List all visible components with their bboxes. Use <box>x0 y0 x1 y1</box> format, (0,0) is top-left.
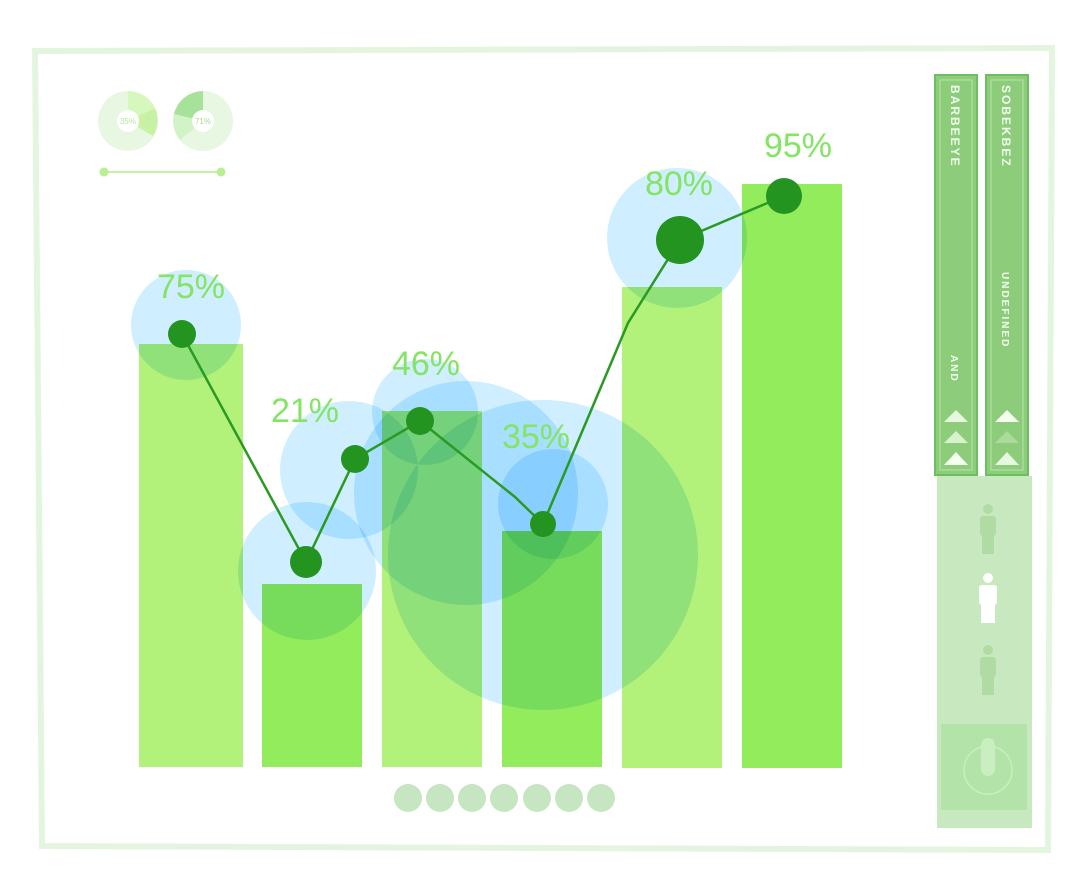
line chart <box>168 178 802 578</box>
side panel 2: UNDEFINED <box>999 272 1010 348</box>
value labels: 21% <box>271 392 339 430</box>
value labels: 95% <box>764 127 832 165</box>
icon: person highlighted <box>979 573 997 623</box>
side panel 1: AND <box>948 355 959 383</box>
icon: person faded 2 <box>980 645 996 695</box>
icon: power button <box>964 738 1012 794</box>
bar chart <box>139 184 842 768</box>
donut: 35%: 35% <box>120 117 136 126</box>
slider <box>100 168 226 176</box>
value labels <box>157 127 832 456</box>
pagination dots <box>394 784 615 812</box>
side panel 1 <box>935 75 977 475</box>
side panel 1: BARBEEYE <box>948 85 962 168</box>
value labels: 46% <box>392 345 460 383</box>
people panel <box>937 476 1032 828</box>
donut charts <box>98 91 233 176</box>
side panel 2: SOBEKBEZ <box>999 85 1013 168</box>
icon: person faded <box>980 504 996 554</box>
bubbles <box>131 168 747 710</box>
value labels: 75% <box>157 268 225 306</box>
donut: 71%: 71% <box>195 117 211 126</box>
side panel 2 <box>986 75 1028 475</box>
value labels: 35% <box>502 418 570 456</box>
value labels: 80% <box>645 165 713 203</box>
